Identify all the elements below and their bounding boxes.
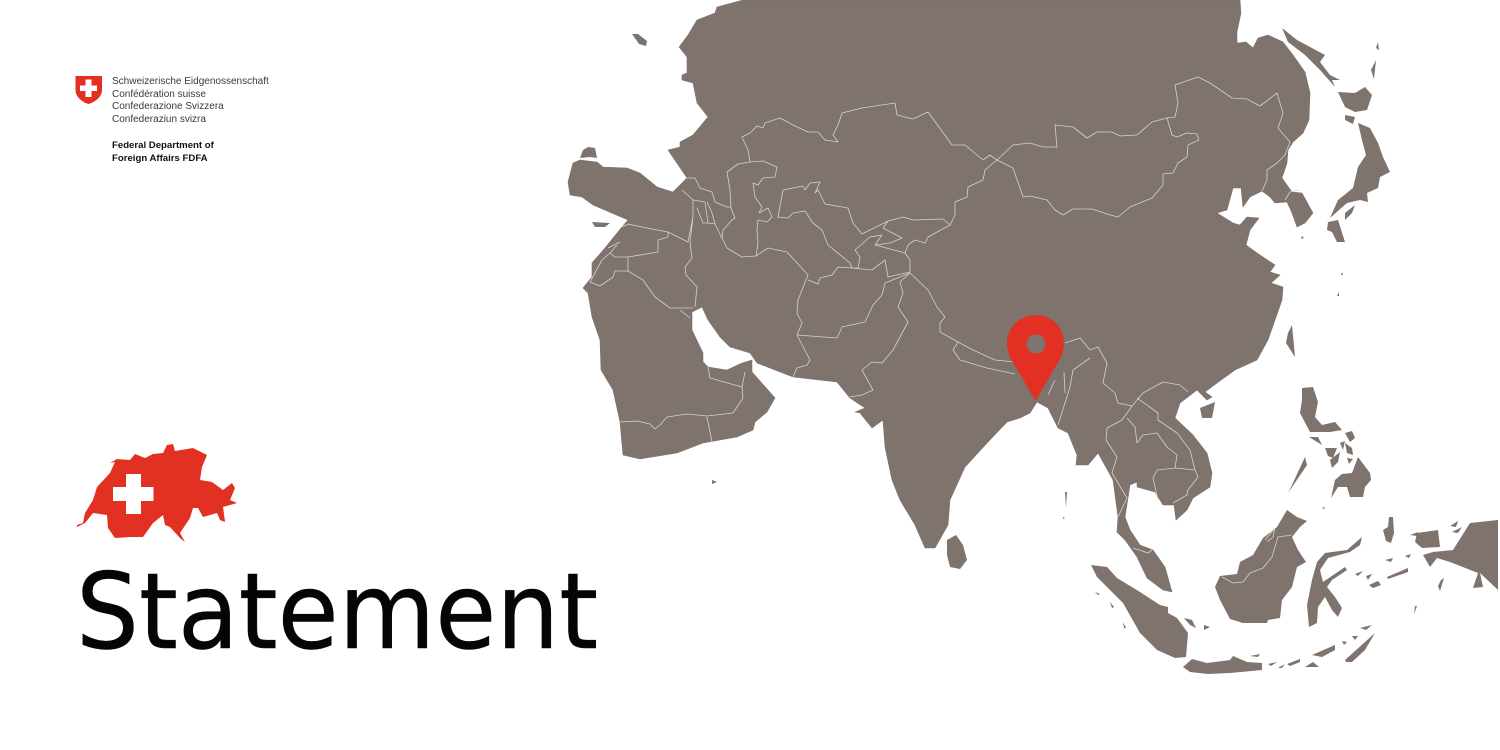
country borders (590, 77, 1299, 583)
icon: Swiss shield (76, 76, 102, 104)
logo: Swiss federal identity (76, 76, 269, 164)
mainland Asia landmass (568, 0, 1313, 592)
islands (580, 28, 1498, 674)
icon: location pin (1007, 315, 1064, 401)
Philippines (1300, 387, 1342, 432)
text: Swiss Confederation names: Confederazione Svizzera (112, 101, 224, 112)
text: Swiss Confederation names: Confédération suisse (112, 89, 206, 100)
icon: map of Switzerland with white cross (77, 444, 237, 542)
title: Statement (76, 551, 598, 673)
text: Swiss Confederation names: Confederaziun svizra (112, 114, 206, 125)
text: Swiss Confederation names: Schweizerische Eidgenossenschaft (112, 76, 269, 87)
text: department name: Foreign Affairs FDFA (112, 153, 208, 164)
text: department name: Federal Department of (112, 140, 214, 151)
text: department name (112, 140, 214, 164)
text: Swiss Confederation names (112, 76, 269, 125)
